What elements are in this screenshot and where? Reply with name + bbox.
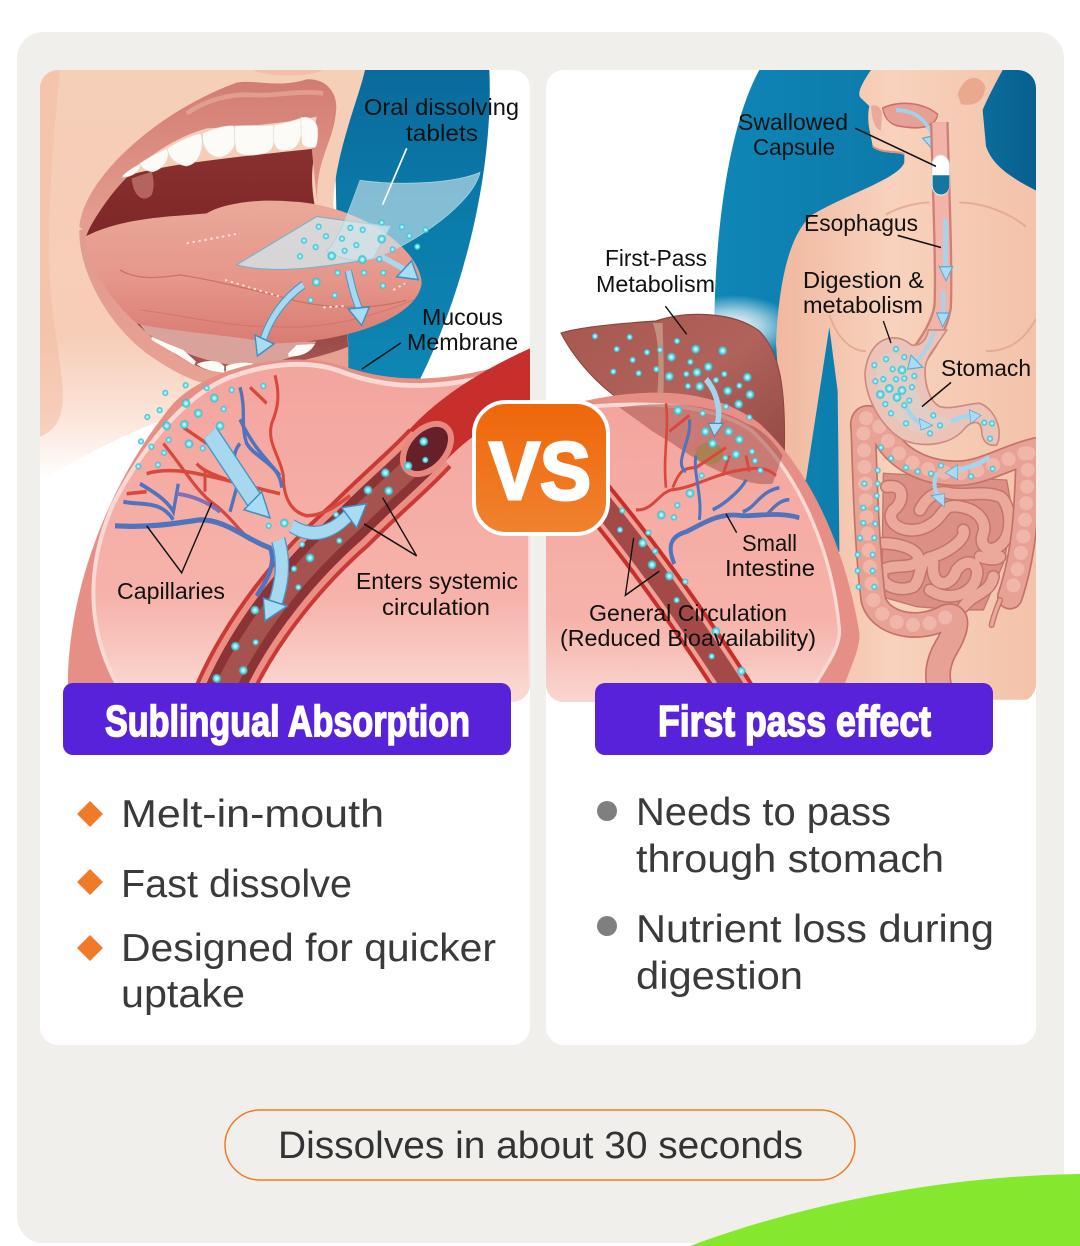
vs badge: VS <box>489 426 591 517</box>
label: swallowed capsule: Capsule <box>753 134 835 160</box>
label: enters systemic circulation: circulation <box>382 594 490 620</box>
label: oral dissolving tablets: tablets <box>406 120 478 146</box>
callout: dissolves in about 30 seconds <box>225 1110 855 1180</box>
label: enters systemic circulation <box>356 568 518 620</box>
heading: sublingual absorption <box>63 683 511 755</box>
label: small intestine: Small <box>742 530 797 556</box>
callout: dissolves in about 30 seconds: Dissolves in about 30 seconds <box>278 1125 803 1167</box>
label: small intestine: Intestine <box>725 555 815 581</box>
bullet: nutrient loss during digestion: Nutrient loss during <box>636 908 994 951</box>
label: enters systemic circulation: Enters systemic <box>356 568 518 594</box>
label: general circulation <box>560 600 816 651</box>
list: sublingual benefits <box>77 793 496 1016</box>
heading: first pass effect: First pass effect <box>658 697 931 746</box>
bullet: nutrient loss during digestion <box>597 908 994 998</box>
bullet: designed for quicker uptake: uptake <box>121 973 245 1016</box>
label: mucous membrane: Mucous <box>422 304 503 330</box>
label: oral dissolving tablets <box>364 94 519 146</box>
digestive tract <box>863 330 1037 690</box>
bullet: nutrient loss during digestion: digestion <box>636 955 803 998</box>
panel: first pass effect <box>543 70 1037 1045</box>
label: first-pass metabolism: Metabolism <box>596 271 715 297</box>
bullet: designed for quicker uptake <box>77 927 496 1016</box>
label: first-pass metabolism: First-Pass <box>605 245 707 271</box>
bullet: designed for quicker uptake: Designed for quicker <box>121 927 496 970</box>
bullet: melt-in-mouth: Melt-in-mouth <box>121 793 384 836</box>
arrows <box>210 257 407 604</box>
panel: sublingual absorption <box>40 70 545 1045</box>
vs badge <box>474 402 608 534</box>
label: swallowed capsule: Swallowed <box>738 109 848 135</box>
label: digestion and metabolism: Digestion & <box>803 267 924 293</box>
label: oral dissolving tablets: Oral dissolving <box>364 94 519 120</box>
left card background <box>40 70 530 1045</box>
label: digestion and metabolism: metabolism <box>803 292 923 318</box>
list: first pass drawbacks <box>597 791 994 998</box>
label: first-pass metabolism <box>596 245 715 297</box>
general circulation vessel <box>590 490 738 695</box>
heading: first pass effect <box>595 683 993 755</box>
label: general circulation: (Reduced Bioavailability) <box>560 625 816 651</box>
green corner swoosh <box>690 1174 1080 1246</box>
label: mucous membrane <box>407 304 518 355</box>
label: small intestine <box>725 530 815 581</box>
right card background <box>546 70 1036 1045</box>
label: stomach: Stomach <box>941 355 1031 381</box>
illustration: digestive system and liver <box>543 70 1037 713</box>
bullet: needs to pass through stomach: Needs to pass <box>636 791 891 834</box>
artery and open vessel <box>222 368 545 695</box>
bullet: needs to pass through stomach: through stomach <box>636 838 944 881</box>
label: mucous membrane: Membrane <box>407 329 518 355</box>
heading: sublingual absorption: Sublingual Absorption <box>105 697 470 746</box>
bullet: needs to pass through stomach <box>597 791 944 881</box>
label: esophagus: Esophagus <box>804 210 918 236</box>
label: capillaries: Capillaries <box>117 578 225 604</box>
illustration: mouth and sublingual circulation <box>40 70 545 700</box>
label: general circulation: General Circulation <box>589 600 787 626</box>
bullet: fast dissolve: Fast dissolve <box>121 863 352 906</box>
label: digestion and metabolism <box>803 267 924 318</box>
label: swallowed capsule <box>738 109 848 160</box>
